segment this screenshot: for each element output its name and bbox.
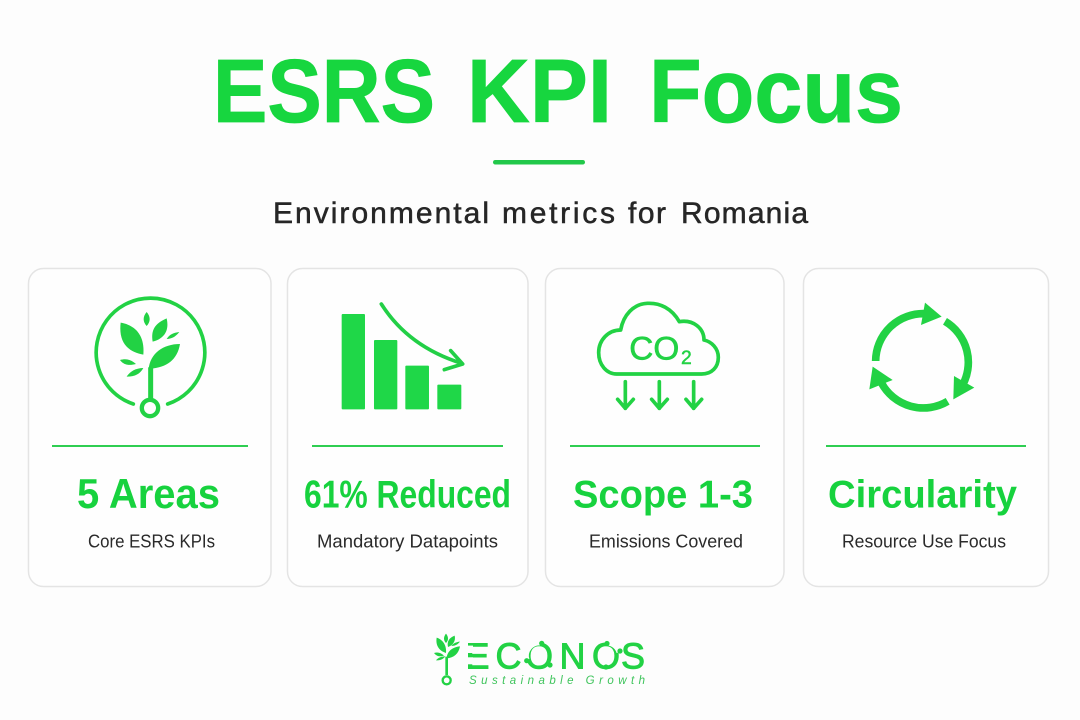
icon: CO2 cloud with down arrows: 2 — [681, 348, 692, 369]
panel: 5 Areas — [28, 268, 271, 586]
icon: falling bar chart with arrow — [342, 304, 463, 409]
title: ESRS — [213, 42, 435, 142]
tagline: Sustainable Growth — [469, 675, 645, 687]
divider — [312, 445, 503, 447]
panel: Circularity — [804, 268, 1048, 586]
icon: plant in circle — [96, 298, 205, 416]
panel: Scope 1-3 — [546, 268, 784, 586]
divider — [570, 445, 760, 447]
title: KPI — [467, 42, 612, 142]
logo icon: sprout — [434, 634, 460, 684]
stat: 5 Areas: 5 Areas — [77, 470, 220, 517]
stat: 61% Reduced: 61% Reduced — [304, 474, 511, 516]
logo: Econos — [434, 634, 645, 687]
stat: Circularity: Circularity — [828, 474, 1017, 516]
subtitle: metrics — [502, 197, 615, 230]
divider — [826, 445, 1026, 447]
label: Resource Use Focus: Resource Use Focus — [842, 532, 1006, 552]
divider — [52, 445, 248, 447]
icon: circular arrows — [869, 303, 974, 408]
panel: 61% Reduced — [288, 268, 528, 586]
title: Focus — [649, 42, 903, 142]
subtitle: for — [628, 197, 666, 230]
icon: CO2 cloud with down arrows: CO — [629, 329, 679, 366]
subtitle: Environmental — [273, 197, 489, 230]
subtitle: Romania — [681, 197, 808, 230]
label: Mandatory Datapoints: Mandatory Datapoints — [317, 532, 498, 552]
stat: Scope 1-3: Scope 1-3 — [573, 474, 753, 516]
title — [213, 42, 903, 142]
label: Core ESRS KPIs: Core ESRS KPIs — [88, 532, 215, 552]
wordmark: ECONOS — [466, 636, 645, 676]
label: Emissions Covered: Emissions Covered — [589, 532, 743, 552]
icon: CO2 cloud with down arrows — [599, 303, 718, 408]
title divider — [493, 160, 585, 164]
subtitle — [273, 197, 808, 230]
